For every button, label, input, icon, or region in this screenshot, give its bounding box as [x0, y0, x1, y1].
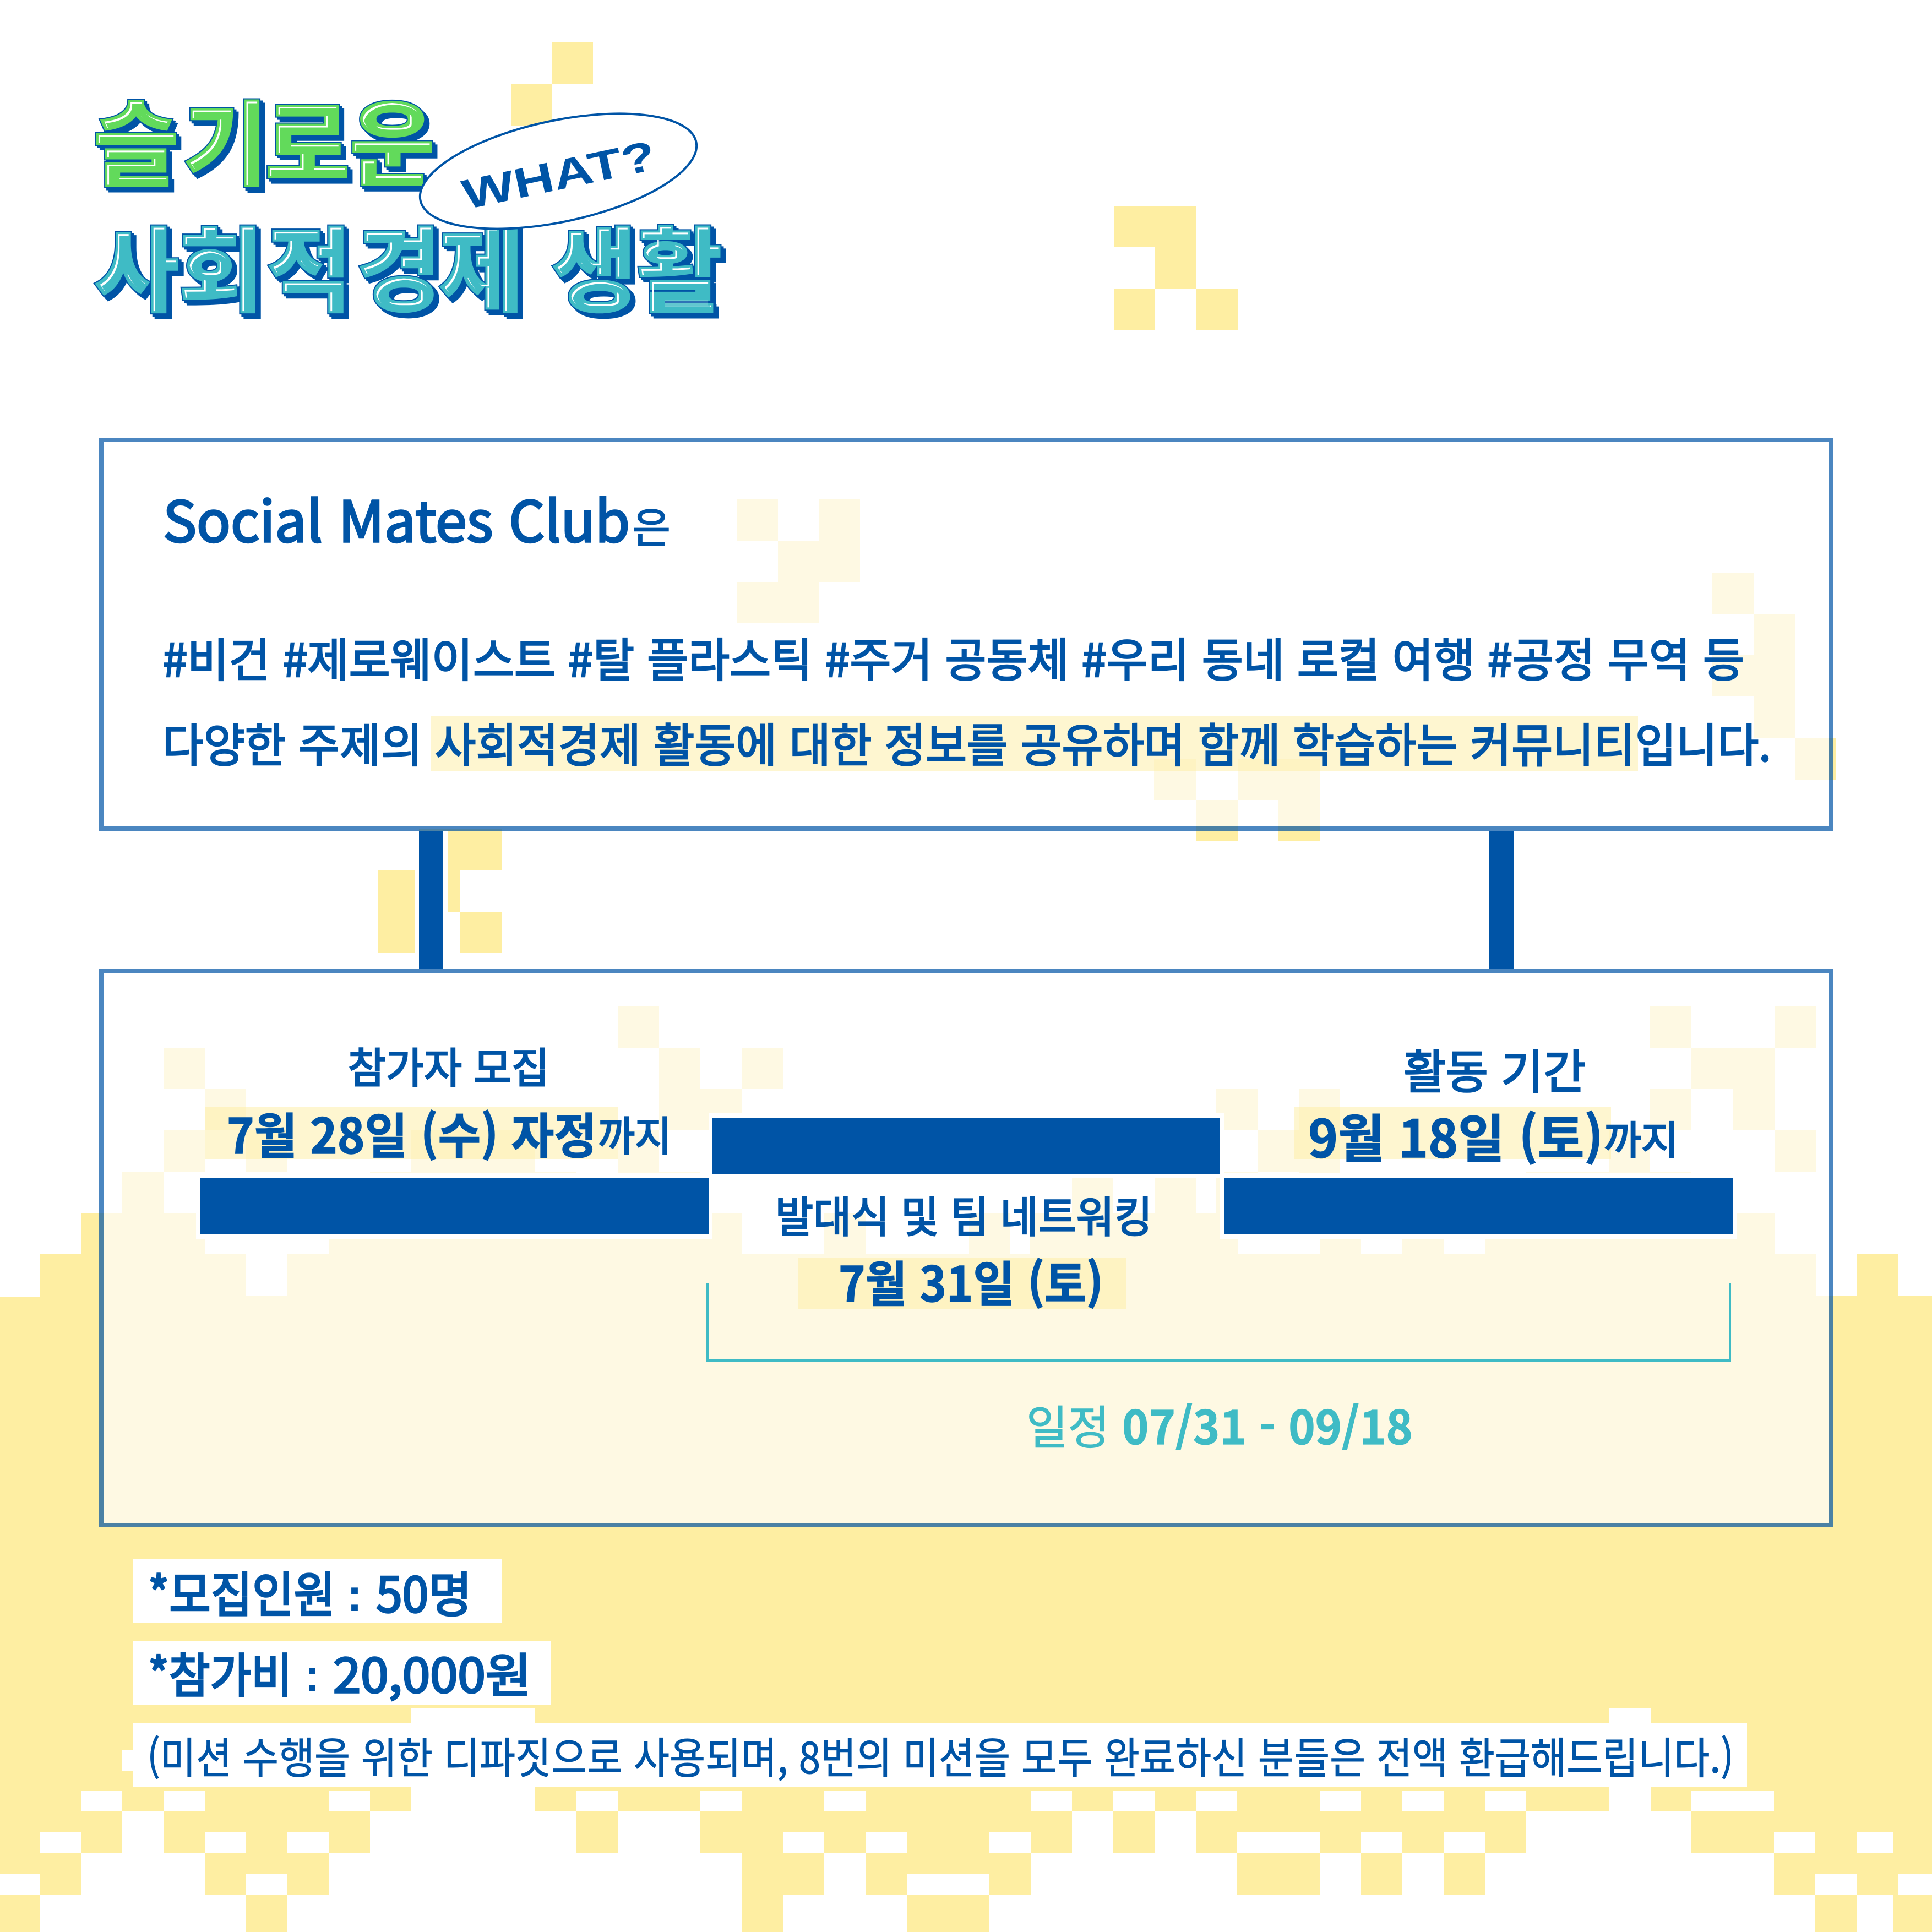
label: activity period — [1294, 1036, 1679, 1173]
connector: right — [1489, 831, 1514, 969]
note: fee — [133, 1637, 551, 1706]
intro heading: 은 — [632, 494, 671, 555]
note: fee: : — [304, 1650, 320, 1701]
connector: left — [415, 831, 448, 969]
title: 슬기로운 사회적경제 생활 — [93, 70, 722, 331]
note: capacity: *모집인원 — [148, 1557, 335, 1626]
label: activity period: 활동 기간 — [1403, 1036, 1586, 1102]
intro hashtags line: #비건 #제로웨이스트 #탈 플라스틱 #주거 공동체 #우리 동네 로컬 여행 #공정 무역 등 — [162, 624, 1744, 690]
label: kick-off: 7월 31일 (토) — [839, 1246, 1103, 1316]
note: capacity: 50명 — [376, 1557, 472, 1626]
intro description line with highlight: 다양한 주제의 사회적경제 활동에 대한 정보를 공유하며 함께 학습하는 커뮤니티입니다. — [162, 709, 1771, 776]
label: kick-off — [775, 1183, 1152, 1316]
note: capacity — [133, 1557, 502, 1626]
timeline bar: kick-off — [709, 1113, 1224, 1178]
timeline bar: recruit — [196, 1173, 712, 1239]
badge: WHAT? — [410, 92, 707, 250]
panel: schedule box — [101, 971, 1831, 1525]
timeline bar: activity — [1220, 1173, 1737, 1239]
title line 1: 슬기로운 — [93, 70, 435, 205]
note: fee: 20,000원 — [333, 1637, 531, 1706]
note: fee: *참가비 — [148, 1637, 292, 1706]
intro heading: Social Mates Club — [163, 477, 630, 558]
note: capacity: : — [347, 1569, 362, 1621]
label: activity period: 까지 — [1604, 1108, 1679, 1166]
label: recruitment: 7월 28일 (수) 자정 — [227, 1098, 597, 1168]
label: activity period: 9월 18일 (토) — [1308, 1098, 1603, 1173]
title line 2: 사회적경제생활 — [94, 196, 722, 331]
note: deposit explanation: (미션 수행을 위한 디파짓으로 사용되며, 8번의 미션을 모두 완료하신 분들은 전액 환급해드립니다.) — [147, 1724, 1734, 1786]
label: recruitment: 까지 — [598, 1104, 672, 1163]
badge: WHAT?: WHAT? — [458, 132, 660, 219]
schedule dates: 일정 07/31 - 09/18 — [1026, 1391, 1413, 1458]
label: recruitment — [205, 1035, 672, 1168]
panel: intro box — [101, 440, 1831, 829]
bracket: schedule span — [708, 1283, 1730, 1360]
label: kick-off: 발대식 및 팀 네트워킹 — [775, 1183, 1152, 1245]
label: recruitment: 참가자 모집 — [348, 1035, 549, 1095]
